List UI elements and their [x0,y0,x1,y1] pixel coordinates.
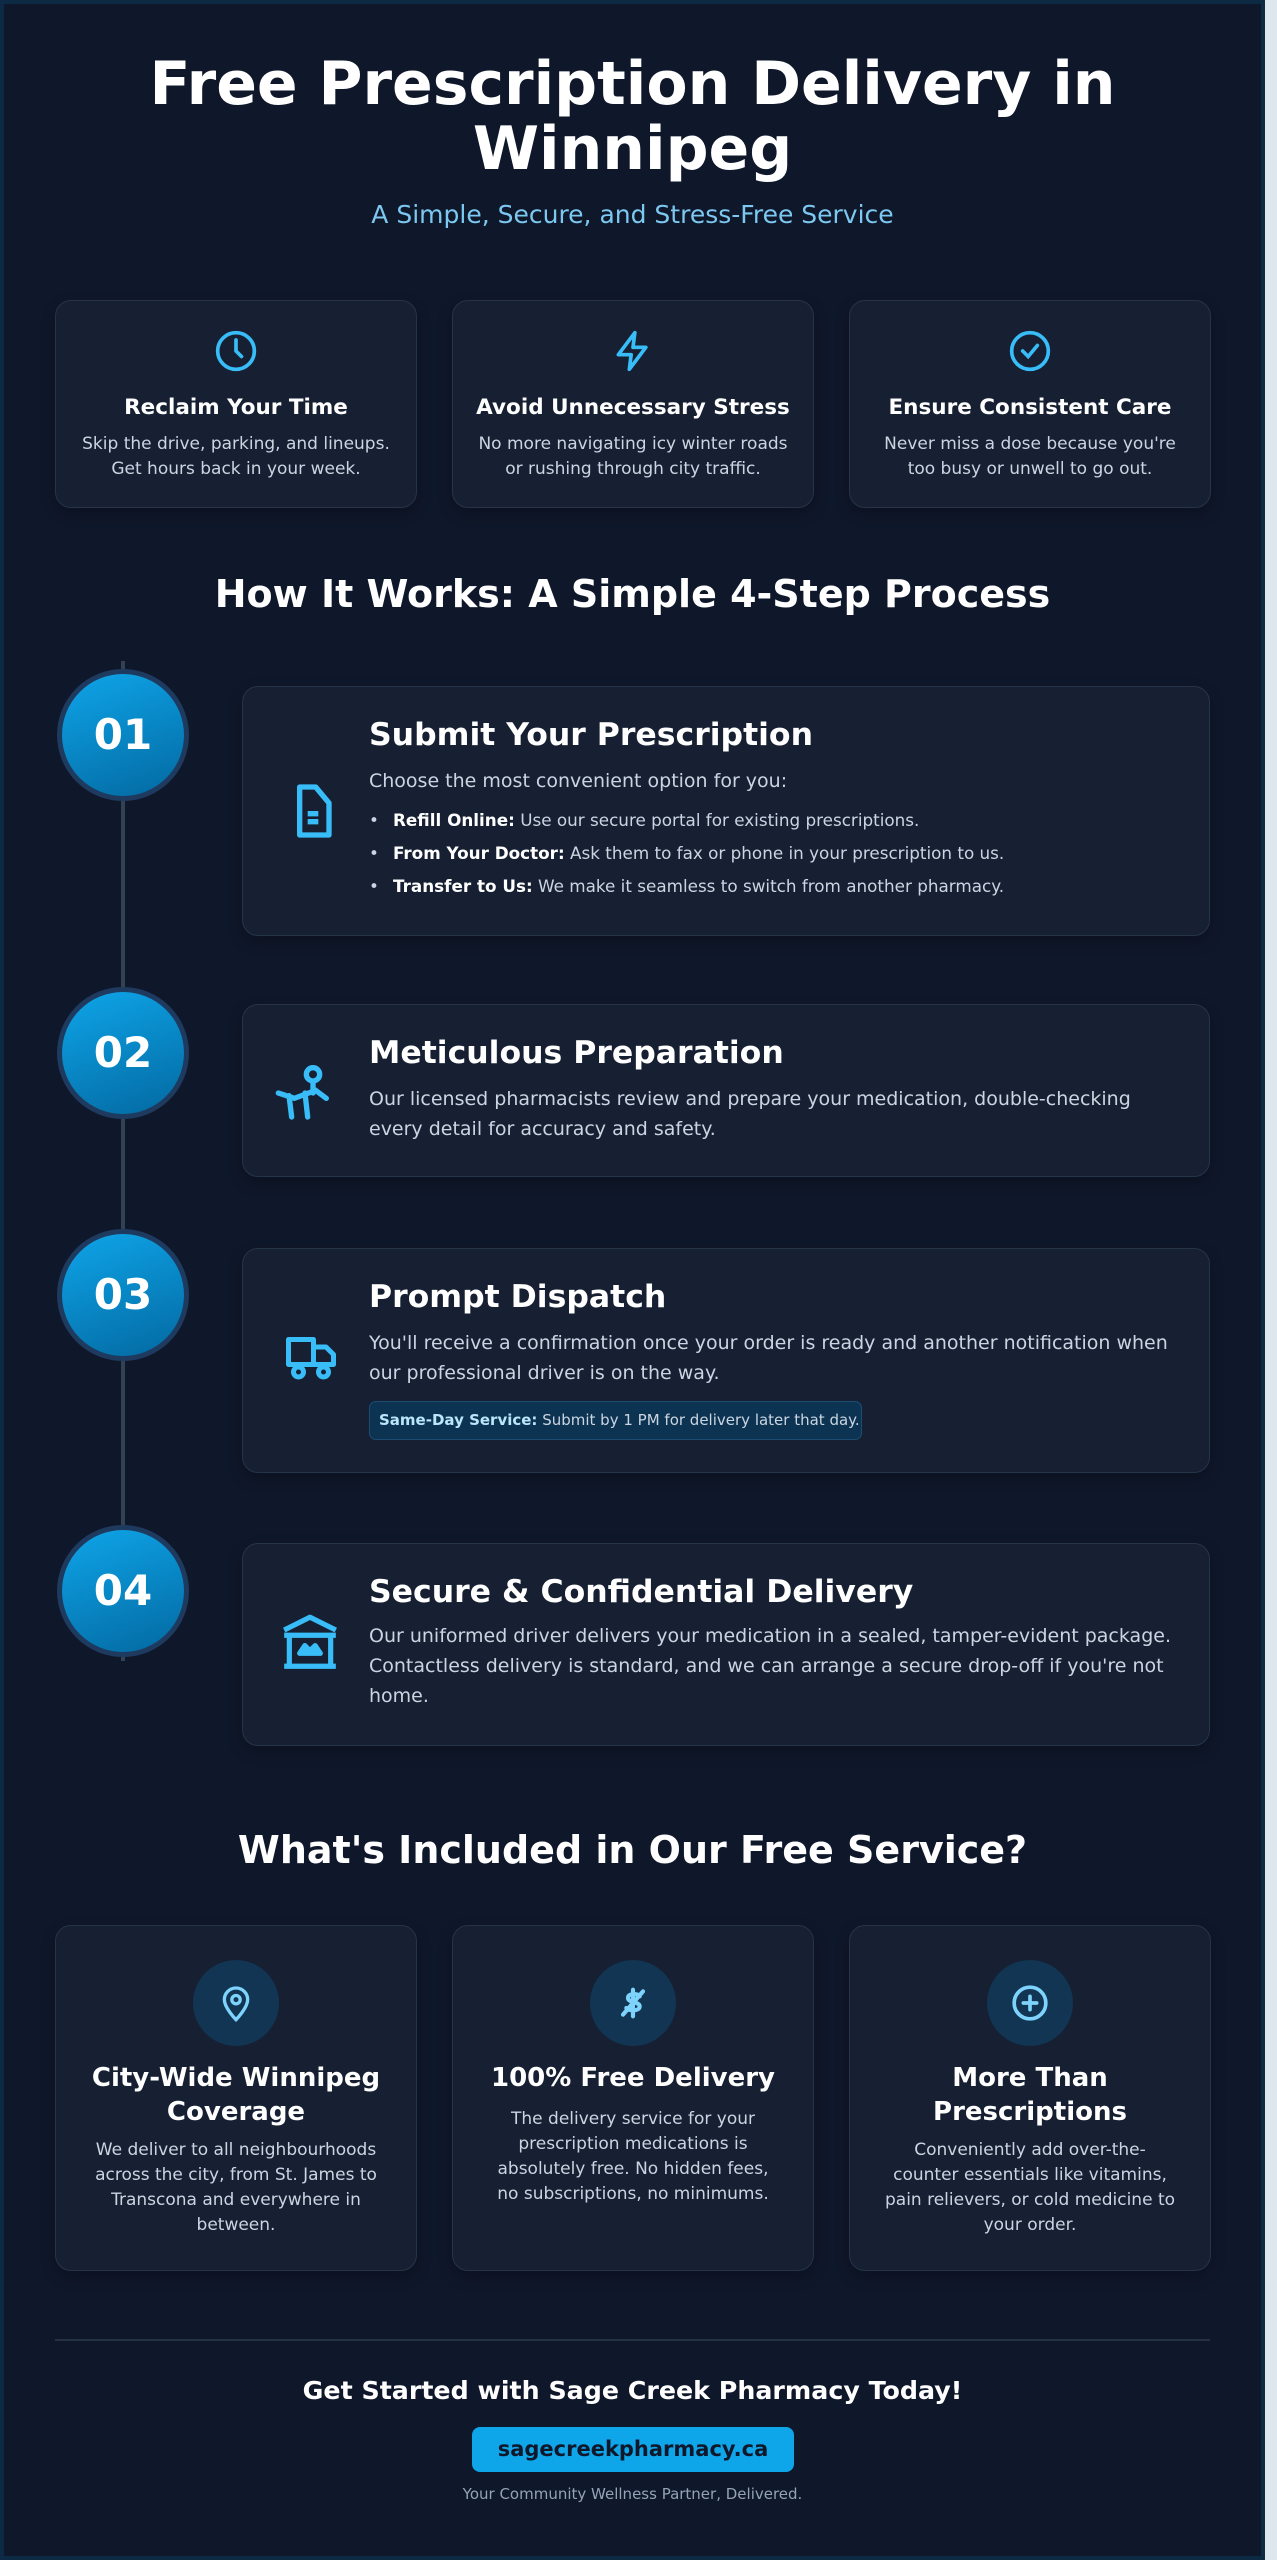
text: Refill Online: Use our secure portal for existing prescriptions. [393,810,919,830]
step number 01 [57,669,189,801]
step number 03 [57,1229,189,1361]
text [369,770,1004,896]
heading: Meticulous Preparation [369,1035,784,1071]
button: website: sagecreekpharmacy.ca [498,2437,768,2461]
heading: what's included: What's Included in Our Free Service? [238,1828,1027,1872]
tagline: Your Community Wellness Partner, Delivered. [463,2485,802,2503]
text: Our uniformed driver delivers your medication in a sealed, tamper-evident package. Contactless delivery is standard, and we can arrange a secure drop-off if you're not home. [369,1625,1171,1707]
panel: avoid stress [452,300,814,508]
icon: no dollar [590,1960,676,2046]
text: The delivery service for your prescription medications is absolutely free. No hidden fees, no subscriptions, no minimums. [497,2109,769,2204]
heading: More Than Prescriptions [933,2063,1127,2127]
heading: Secure & Confidential Delivery [369,1574,913,1610]
text: counter essentials like vitamins, [893,2165,1167,2185]
footer heading: Get Started with Sage Creek Pharmacy Today! [303,2376,962,2405]
text: We deliver to all neighbourhoods across the city, from St. James to Transcona and everywhere in between. [95,2140,377,2235]
icon: bolt [616,330,648,372]
text [885,2140,1175,2235]
icon: truck [286,1337,336,1380]
icon: clock [216,330,256,372]
panel: step 4 [242,1543,1210,1746]
panel: consistent care [849,300,1211,508]
heading: Ensure Consistent Care [888,395,1172,420]
heading: Submit Your Prescription [369,717,813,753]
heading: Avoid Unnecessary Stress [476,395,790,420]
icon: plus circle [987,1960,1073,2046]
callout: same-day: Same-Day Service: Submit by 1 PM for delivery later that day. [379,1411,860,1429]
step number 01: 01 [94,710,152,759]
heading: 100% Free Delivery [491,2063,775,2093]
title: Winnipeg [473,114,792,184]
text: No more navigating icy winter roads or rushing through city traffic. [478,434,788,479]
step number 02: 02 [94,1028,152,1077]
heading: how it works: How It Works: A Simple 4-Step Process [215,572,1050,616]
panel: free delivery [452,1925,814,2271]
panel: step 1 [242,686,1210,936]
text: your order. [984,2215,1076,2235]
icon: check circle [1010,330,1050,372]
panel: more than prescriptions [849,1925,1211,2271]
text: You'll receive a confirmation once your order is ready and another notification when our professional driver is on the way. [369,1332,1168,1384]
step number 03: 03 [94,1270,152,1319]
text: Transfer to Us: We make it seamless to switch from another pharmacy. [393,876,1004,896]
subtitle: A Simple, Secure, and Stress-Free Service [371,200,894,229]
step number 02 [57,987,189,1119]
panel: step 3 [242,1248,1210,1473]
text: Never miss a dose because you're too busy or unwell to go out. [884,434,1176,479]
icon: pharmacist [276,1065,329,1120]
text: Our licensed pharmacists review and prepare your medication, double-checking every detail for accuracy and safety. [369,1088,1131,1140]
step number 04: 04 [94,1566,152,1615]
timeline line [121,661,125,1661]
title [149,49,1116,184]
button: website [472,2427,794,2472]
panel: reclaim your time [55,300,417,508]
text: Skip the drive, parking, and lineups. Get hours back in your week. [82,434,390,479]
text: Conveniently add over-the- [914,2140,1146,2160]
step number 04 [57,1525,189,1657]
text: From Your Doctor: Ask them to fax or phone in your prescription to us. [393,843,1004,863]
text: Choose the most convenient option for you: [369,770,787,792]
icon: location pin [193,1960,279,2046]
icon: document [297,784,332,838]
callout: same-day [369,1401,862,1440]
panel: city-wide coverage [55,1925,417,2271]
heading: Prompt Dispatch [369,1279,666,1315]
heading: City-Wide Winnipeg Coverage [92,2063,380,2127]
heading: Reclaim Your Time [124,395,348,420]
icon: house box [283,1614,337,1669]
text: pain relievers, or cold medicine to [885,2190,1175,2210]
panel: step 2 [242,1004,1210,1177]
title: Free Prescription Delivery in [149,49,1116,119]
